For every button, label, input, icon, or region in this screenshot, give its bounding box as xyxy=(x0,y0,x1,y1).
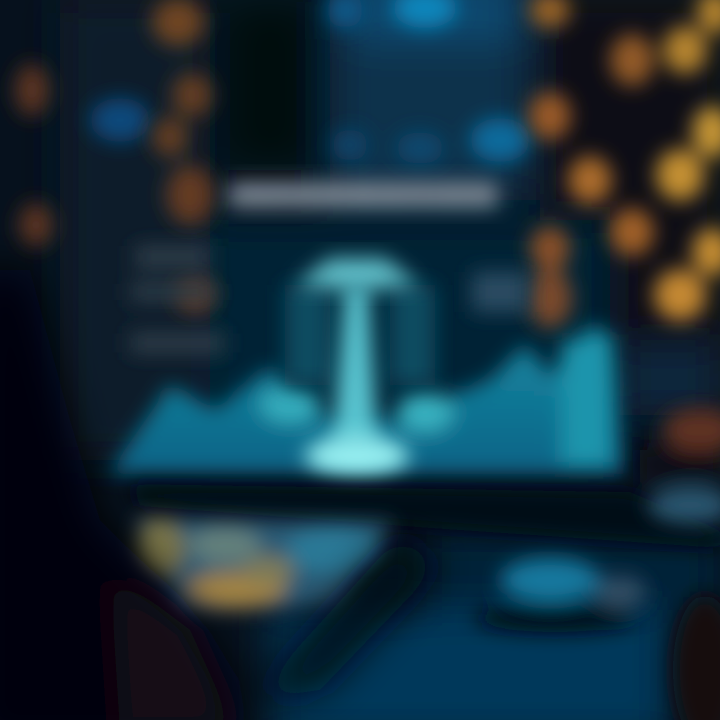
blue highlights xyxy=(90,0,530,164)
heading (blurred title bar): INFORMATION xyxy=(233,179,493,209)
tablet on desk xyxy=(135,518,395,612)
foreground silhouette of person xyxy=(0,270,240,720)
right text block (blurred) xyxy=(472,272,528,312)
icon: glowing balance scale xyxy=(285,258,435,476)
orange bokeh lights xyxy=(15,0,720,328)
scale base xyxy=(305,436,409,476)
area chart xyxy=(108,325,624,474)
scale beam xyxy=(295,258,420,290)
arm shadow xyxy=(250,535,440,700)
right side objects xyxy=(640,408,720,720)
desk shelf shadow xyxy=(130,484,720,548)
scale side panels xyxy=(285,285,435,385)
left text block (blurred) xyxy=(130,246,225,353)
mouse device xyxy=(475,558,646,632)
scale stem xyxy=(332,285,378,450)
